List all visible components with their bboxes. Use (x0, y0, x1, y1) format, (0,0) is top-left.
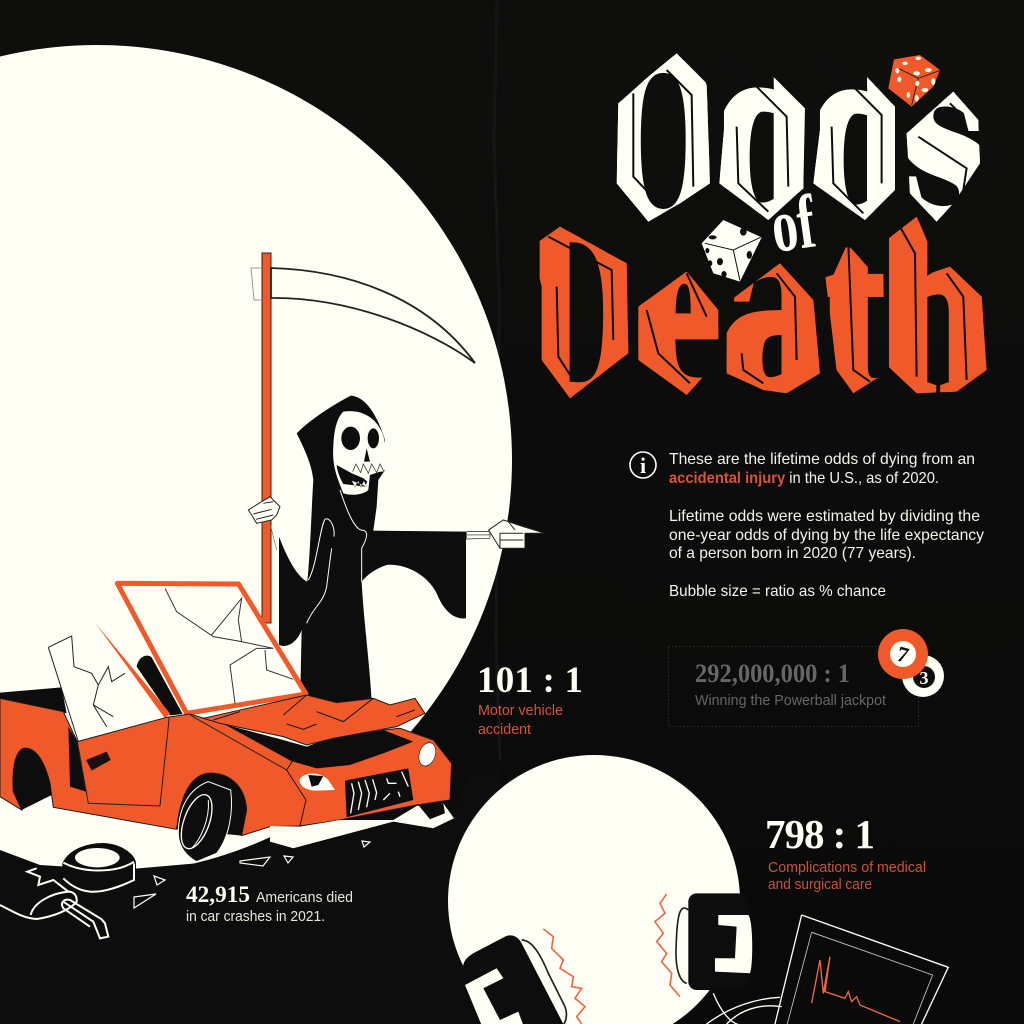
title: Death: e (630, 145, 732, 461)
title inline strokes (548, 63, 967, 383)
left headlight (300, 774, 335, 791)
debris: detached wheel and wreckage (0, 844, 135, 938)
info icon (630, 452, 656, 478)
car front (287, 728, 452, 826)
scythe pole (262, 253, 271, 623)
hood creases (213, 695, 415, 729)
stat: motor vehicle accident: Motor vehicle (478, 702, 563, 719)
stat: Powerball comparison box: 292,000,000 : 1 (695, 659, 850, 688)
intro text block: one-year odds of dying by the life expectancy (669, 527, 984, 544)
intro text block: Lifetime odds were estimated by dividing the (669, 508, 980, 525)
shock zigzags (655, 894, 680, 997)
intro text block: Bubble size = ratio as % chance (669, 583, 886, 600)
illustration: grim reaper (248, 253, 545, 707)
crumpled hood (203, 695, 425, 745)
title: Death (540, 216, 987, 398)
icon: lottery balls: 3 (920, 668, 928, 688)
door gap (68, 727, 86, 792)
stat: medical complications (765, 811, 926, 893)
stat: motor vehicle accident: accident (478, 721, 532, 738)
stat: Powerball comparison box: Winning the Powerball jackpot (695, 692, 887, 709)
title: Odds: O (608, 0, 718, 280)
stat note: car crash deaths: Americans died (256, 889, 353, 906)
reaper robe (279, 396, 466, 707)
title: of: of (766, 180, 821, 269)
engine bay (227, 725, 413, 768)
title: Death: a (719, 132, 832, 464)
windshield cracks (165, 588, 293, 703)
intro text block: of a person born in 2020 (77 years). (669, 545, 916, 562)
robe highlight lines (307, 490, 367, 623)
stat note: car crash deaths: 42,915 (186, 882, 250, 907)
title: Death: t (818, 169, 888, 452)
rear wheel arch (13, 748, 52, 810)
icon: lottery balls: 7 (894, 641, 911, 668)
left skeletal hand (248, 497, 280, 550)
right pointing skeletal hand (467, 520, 545, 548)
right headlight (416, 740, 439, 768)
title: Death: D (527, 158, 639, 462)
ground shadow below car (0, 770, 500, 1024)
door handle (86, 752, 111, 771)
illustration: crashed red car (0, 583, 454, 862)
title: Odds (616, 53, 980, 222)
scythe blade (271, 268, 475, 363)
stat: motor vehicle accident (477, 660, 583, 738)
car body (0, 698, 307, 836)
icon: red die (888, 55, 940, 107)
scythe tang (251, 268, 262, 300)
bumper shard (270, 803, 454, 848)
intro text block (669, 451, 984, 600)
monitor (775, 915, 948, 1024)
stat: medical complications: 798 : 1 (765, 811, 875, 857)
stat note: car crash deaths: in car crashes in 2021. (186, 908, 325, 925)
bubble: motor vehicle accident (0, 45, 512, 875)
illustration: defibrillator (463, 893, 948, 1024)
windshield frame (117, 583, 306, 713)
icon: white die (702, 220, 762, 282)
front tyre (175, 782, 231, 862)
door lines (77, 715, 287, 806)
stat: Powerball comparison box (668, 646, 918, 726)
stat: medical complications: Complications of medical (768, 859, 926, 876)
info icon: i (640, 453, 646, 478)
skull (333, 411, 385, 495)
title: Death: h (878, 158, 996, 457)
rear deck (0, 687, 67, 713)
front wheel arch (177, 773, 247, 836)
car grille (345, 768, 413, 817)
stat: motor vehicle accident: 101 : 1 (477, 660, 583, 701)
intro text block: These are the lifetime odds of dying from an (669, 451, 975, 468)
debris: glass shards (134, 841, 370, 908)
stat: medical complications: and surgical care (768, 876, 872, 893)
car seat (137, 656, 183, 715)
bubble: medical and surgical care (448, 755, 740, 1024)
stat note: car crash deaths (186, 882, 353, 925)
wires (707, 993, 782, 1024)
shattered side window (48, 636, 125, 742)
right paddle (676, 893, 752, 990)
icon: lottery balls (878, 629, 944, 697)
left paddle (463, 935, 566, 1024)
door window post (95, 623, 170, 718)
intro text block: accidental injury in the U.S., as of 2020. (669, 470, 939, 487)
